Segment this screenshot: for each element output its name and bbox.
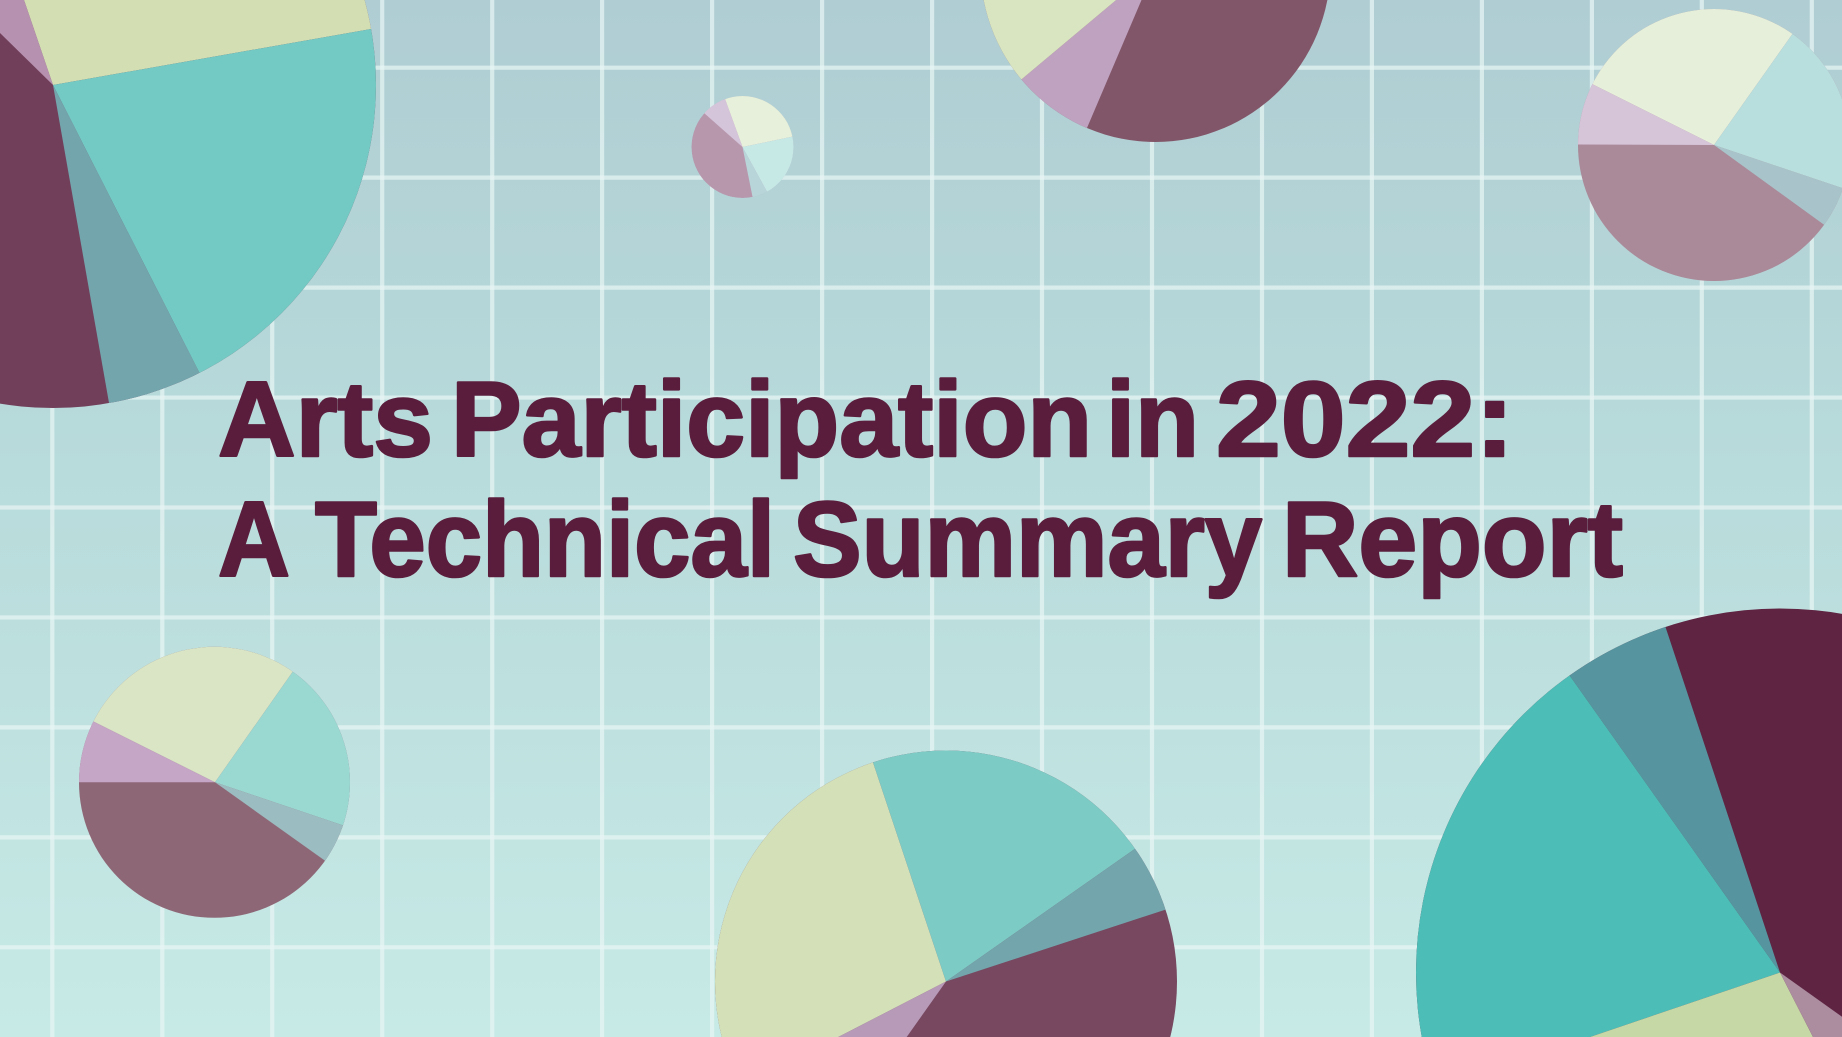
pie chart: top left large <box>0 0 376 408</box>
title line 1: Arts <box>218 359 433 479</box>
title line 1: Participation <box>451 359 1092 479</box>
title line 2 <box>218 479 1623 599</box>
title line 1 <box>218 359 1514 479</box>
slice: pale yellow-green <box>1592 9 1792 145</box>
slice: maroon <box>714 750 1178 1037</box>
slice: teal <box>1416 676 1780 1037</box>
title line 2: Summary <box>793 479 1262 599</box>
slice: maroon <box>1577 8 1842 282</box>
slice: light teal <box>742 136 794 192</box>
title line 1: in <box>1106 359 1199 479</box>
slice: pink <box>1578 84 1714 145</box>
slice: pink <box>1022 0 1142 128</box>
slice: pink <box>0 0 53 85</box>
title line 2: Report <box>1282 479 1623 599</box>
slice: pale yellow-green <box>1590 972 1813 1037</box>
slice: pink <box>1780 972 1842 1037</box>
slice: pale yellow-green <box>24 0 376 85</box>
slice: grey-blue <box>1570 627 1780 972</box>
slice: grey-blue <box>216 782 343 860</box>
slice: maroon <box>692 96 794 198</box>
pie chart: top right <box>1577 8 1842 282</box>
pie chart: top centre <box>980 0 1331 142</box>
slice: pale yellow-green <box>94 646 293 782</box>
slice: pink <box>79 722 215 782</box>
pie chart: bottom right large <box>1416 608 1842 1037</box>
pie chart: small top centre-left <box>692 96 794 198</box>
slice: teal <box>215 672 350 826</box>
slice: teal <box>53 28 376 408</box>
title <box>218 359 1623 599</box>
slice: grey-blue <box>53 86 200 403</box>
slice: pale yellow-green <box>714 750 946 1037</box>
slice: grey-blue <box>742 148 767 197</box>
slice: maroon <box>980 0 1331 142</box>
slice: grey-blue <box>946 849 1166 982</box>
slice: pink <box>838 982 946 1037</box>
title line 1: 2022: <box>1216 359 1514 479</box>
pie chart: lower left <box>78 646 350 918</box>
slice: light teal <box>1714 34 1842 188</box>
slice: teal <box>873 750 1135 982</box>
slice: grey-blue <box>1714 145 1842 224</box>
title line 2: Technical <box>315 479 775 599</box>
slice: maroon <box>0 0 376 408</box>
slice: maroon <box>1416 608 1842 1037</box>
title line 2: A <box>218 479 290 599</box>
slice: pale yellow-green <box>725 96 792 147</box>
slice: maroon <box>78 646 350 918</box>
pie chart: bottom centre <box>714 750 1178 1037</box>
slice: pale yellow-green <box>984 0 1116 80</box>
slice: pink <box>704 99 742 147</box>
